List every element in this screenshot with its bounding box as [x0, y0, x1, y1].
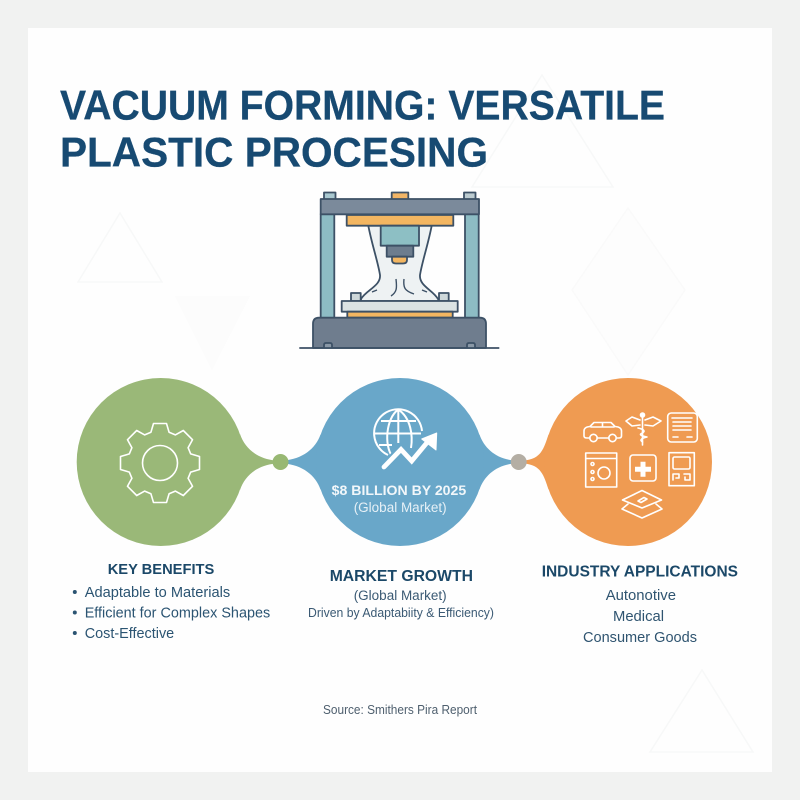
icon: document panel: [668, 413, 697, 442]
icon: gear: [120, 424, 200, 502]
icon: car: [584, 422, 622, 442]
icon: vacuum forming machine: [299, 192, 499, 348]
icon: globe with rising arrow: [374, 409, 437, 467]
panel: industry applications circle: [524, 378, 712, 546]
text block: industry applications: INDUSTRY APPLICATIONS: [542, 564, 738, 581]
text block: industry applications: Medical: [613, 608, 664, 625]
text block: industry applications: [542, 564, 738, 646]
title: VACUUM FORMING: VERSATILE: [60, 82, 665, 128]
text block: market growth: MARKET GROWTH: [330, 568, 473, 585]
text block: market growth: [308, 568, 494, 620]
panel: market growth circle: (Global Market): [354, 500, 447, 515]
text block: key benefits: KEY BENEFITS: [108, 561, 214, 578]
faint background triangles: [78, 75, 753, 752]
market value text: $8 BILLION BY 2025: [332, 482, 466, 498]
icon: stacked layers: [622, 490, 662, 518]
connector dot: green: [272, 454, 288, 470]
text block: key benefits: Adaptable to Materials: [85, 584, 230, 601]
panel: market growth circle: [284, 378, 514, 546]
icon: caduceus: [626, 413, 661, 445]
text block: market growth: (Global Market): [354, 588, 447, 603]
panel: key benefits circle: [77, 378, 276, 546]
title: PLASTIC PROCESING: [60, 129, 488, 176]
connector dot: grey: [511, 454, 527, 470]
text block: key benefits: Cost-Effective: [85, 625, 174, 642]
text block: market growth: Driven by Adaptabiity & Efficiency): [308, 606, 494, 620]
text block: industry applications: Autonotive: [606, 587, 676, 604]
text block: industry applications: Consumer Goods: [583, 629, 697, 646]
text block: key benefits: Efficient for Complex Shapes: [85, 604, 270, 622]
icon: washing machine: [586, 453, 617, 487]
icon: medical cross: [630, 455, 656, 481]
icon: control panel: [669, 453, 694, 486]
source note: Source: Smithers Pira Report: [323, 703, 477, 717]
title: [60, 82, 665, 176]
text block: key benefits: [73, 561, 270, 642]
